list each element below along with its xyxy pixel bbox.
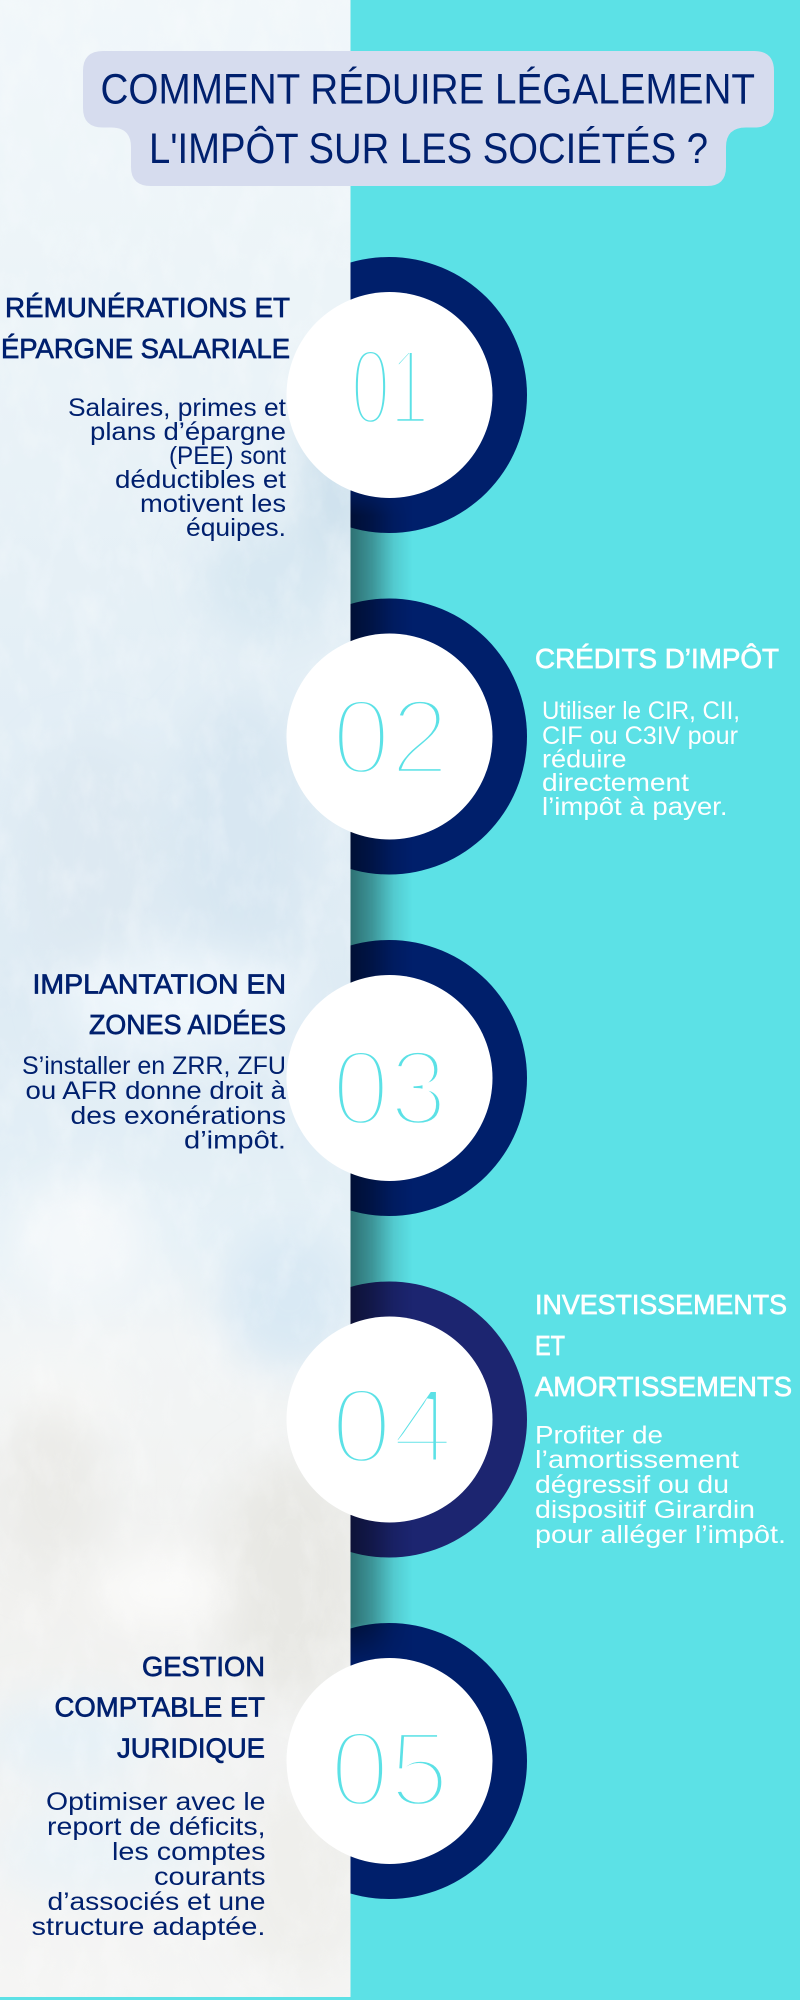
step 05 description: Optimiser avec le <box>46 1788 266 1816</box>
step 03 description: d’impôt. <box>184 1126 286 1154</box>
step 01 description: motivent les <box>140 490 286 518</box>
background: watercolor left panel <box>0 0 370 1997</box>
step 04 heading: ET <box>535 1330 565 1361</box>
step 04 description: pour alléger l’impôt. <box>535 1521 786 1549</box>
step 04 description: dégressif ou du <box>535 1471 729 1499</box>
step 03 heading <box>32 968 286 1040</box>
step 05 heading: COMPTABLE ET <box>54 1692 265 1722</box>
step 01 description: plans d’épargne <box>90 418 286 446</box>
step 04 text <box>535 1289 792 1549</box>
step 02 number disc: 02 <box>332 676 449 797</box>
step 02 number disc <box>286 634 492 840</box>
step 02 text <box>535 643 779 821</box>
step 03 text <box>22 968 286 1154</box>
step 03 description <box>22 1052 286 1154</box>
step 03 description: S’installer en ZRR, ZFU <box>22 1052 286 1080</box>
step 05 heading: JURIDIQUE <box>117 1732 265 1764</box>
step 05 number disc <box>286 1658 492 1864</box>
step 05 description: d’associés et une <box>48 1888 266 1916</box>
step 05 description: les comptes <box>112 1838 266 1866</box>
step 01 heading: RÉMUNÉRATIONS ET <box>5 292 290 323</box>
step 01 ring <box>350 257 527 533</box>
step 02 description: directement <box>542 769 689 797</box>
step 03 description: ou AFR donne droit à <box>26 1077 286 1105</box>
step 01 number disc: 01 <box>351 326 429 447</box>
step 02 description <box>542 697 740 821</box>
step 01 number disc <box>286 292 492 498</box>
step 01 description: (PEE) sont <box>169 442 286 470</box>
step 01 description: déductibles et <box>115 466 286 494</box>
step 01 description: équipes. <box>186 514 286 542</box>
step 04 description: Profiter de <box>535 1422 663 1450</box>
step 05 ring <box>350 1623 527 1899</box>
step 05 heading: GESTION <box>142 1651 265 1682</box>
title banner <box>83 51 774 186</box>
step 04 description: l’amortissement <box>535 1446 739 1474</box>
step 02 description: réduire <box>542 746 626 774</box>
step 03 number disc: 03 <box>332 1027 447 1148</box>
connecting shadow column <box>350 490 406 1662</box>
step 03 description: des exonérations <box>70 1102 286 1130</box>
step 01 description: Salaires, primes et <box>68 394 286 422</box>
step 04 number disc: 04 <box>331 1365 453 1486</box>
step 04 heading <box>535 1289 792 1402</box>
step 02 ring <box>350 598 527 874</box>
step 04 heading: AMORTISSEMENTS <box>535 1371 792 1402</box>
step 05 description: structure adaptée. <box>32 1913 266 1941</box>
step 01 text <box>1 292 290 542</box>
title banner: L'IMPÔT SUR LES SOCIÉTÉS ? <box>149 125 708 173</box>
step 04 heading: INVESTISSEMENTS <box>535 1289 787 1320</box>
step 05 description <box>32 1788 266 1941</box>
step 04 ring <box>350 1282 527 1558</box>
step 04 description: dispositif Girardin <box>535 1496 755 1524</box>
step 05 number disc: 05 <box>330 1708 449 1829</box>
step 03 heading: IMPLANTATION EN <box>32 968 286 1000</box>
step 02 description: l’impôt à payer. <box>542 793 728 821</box>
step 04 description <box>535 1422 786 1549</box>
step 02 description: CIF ou C3IV pour <box>542 722 738 750</box>
step 03 heading: ZONES AIDÉES <box>89 1009 286 1040</box>
step 01 description <box>68 394 286 542</box>
step 04 number disc <box>286 1316 492 1522</box>
step 01 heading <box>1 292 290 364</box>
step 01 heading: ÉPARGNE SALARIALE <box>1 333 290 364</box>
step 02 description: Utiliser le CIR, CII, <box>542 697 740 725</box>
step 05 heading <box>54 1651 265 1764</box>
step 05 description: report de déficits, <box>47 1813 266 1841</box>
step 03 ring <box>350 940 527 1216</box>
step 03 number disc <box>286 975 492 1181</box>
step 05 text <box>32 1651 266 1941</box>
step 05 description: courants <box>154 1863 266 1891</box>
step 02 heading: CRÉDITS D’IMPÔT <box>535 643 779 674</box>
